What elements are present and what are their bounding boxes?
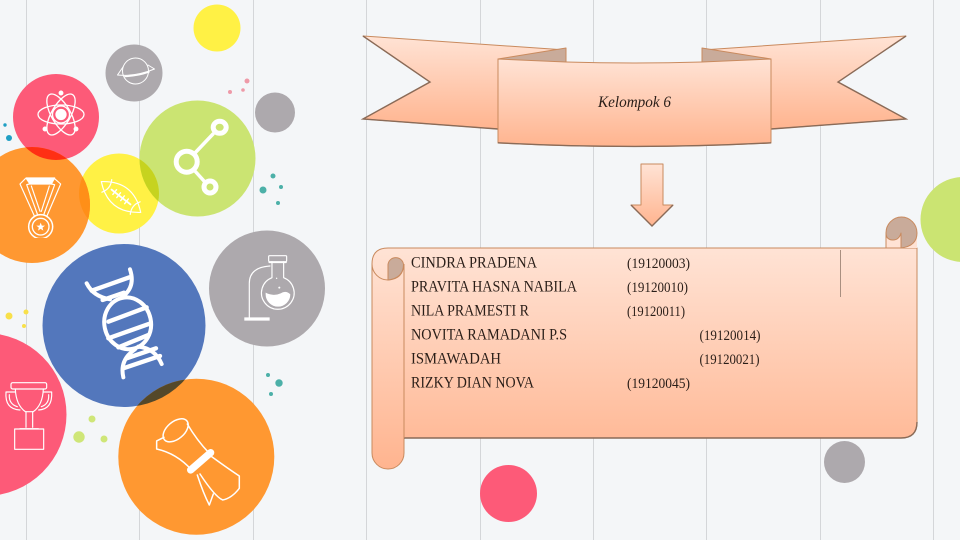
member numbers: (19120003) (627, 256, 690, 272)
dna badge (42, 244, 206, 407)
icon: atom (38, 90, 84, 139)
bottom gray circle (824, 441, 865, 483)
football badge (79, 154, 159, 234)
icon: network nodes (176, 121, 226, 193)
icon: diploma scroll (157, 414, 239, 505)
icon: planet (118, 58, 154, 84)
member names: ISMAWADAH (411, 350, 501, 368)
ribbon banner (363, 36, 906, 146)
decorative dot clusters (3, 78, 283, 443)
yellow and green overlap (140, 159, 159, 202)
right green circle (920, 177, 960, 262)
scroll left curl (388, 258, 404, 280)
member names: NOVITA RAMADANI P.S (411, 326, 567, 344)
member names: CINDRA PRADENA (411, 254, 537, 272)
banner title: Kelompok 6 (597, 94, 671, 111)
member names: RIZKY DIAN NOVA (411, 374, 534, 392)
trophy badge (0, 333, 66, 496)
ribbon centre (498, 59, 771, 146)
flask badge (209, 230, 325, 346)
icon: football (95, 173, 147, 221)
medal badge (0, 147, 90, 263)
member names: PRAVITA HASNA NABILA (411, 278, 577, 296)
yellow and orange overlap (79, 176, 90, 220)
blue and orange overlap (137, 380, 185, 406)
scroll panel (372, 217, 917, 469)
bottom pink circle (480, 465, 537, 522)
pink and orange overlap (26, 147, 67, 160)
member numbers: (19120010) (627, 280, 688, 296)
icon: flask (244, 256, 294, 319)
icon: dna helix (87, 269, 162, 377)
member names: NILA PRAMESTI R (411, 302, 529, 320)
member numbers: (19120011) (627, 304, 685, 320)
blue and orange overlap (137, 380, 185, 406)
member numbers: (19120014) (700, 328, 760, 344)
scroll vertical rule (840, 250, 842, 297)
scroll body (372, 248, 917, 469)
yellow circle (194, 4, 240, 52)
icon: trophy (6, 383, 52, 449)
atom badge (13, 74, 99, 160)
right ribbon fold (702, 48, 771, 64)
network badge (140, 100, 256, 216)
member names (411, 254, 577, 392)
member numbers (627, 256, 760, 392)
planet badge (106, 44, 162, 102)
left ribbon tail (363, 36, 566, 129)
left ribbon fold (498, 48, 566, 64)
down arrow (631, 164, 673, 226)
right ribbon tail (702, 36, 906, 129)
diploma badge (118, 379, 274, 535)
scroll top curl (886, 217, 917, 248)
member numbers: (19120045) (627, 376, 690, 392)
icon: medal (20, 178, 61, 239)
member numbers: (19120021) (700, 352, 760, 368)
small gray circle (255, 92, 295, 132)
